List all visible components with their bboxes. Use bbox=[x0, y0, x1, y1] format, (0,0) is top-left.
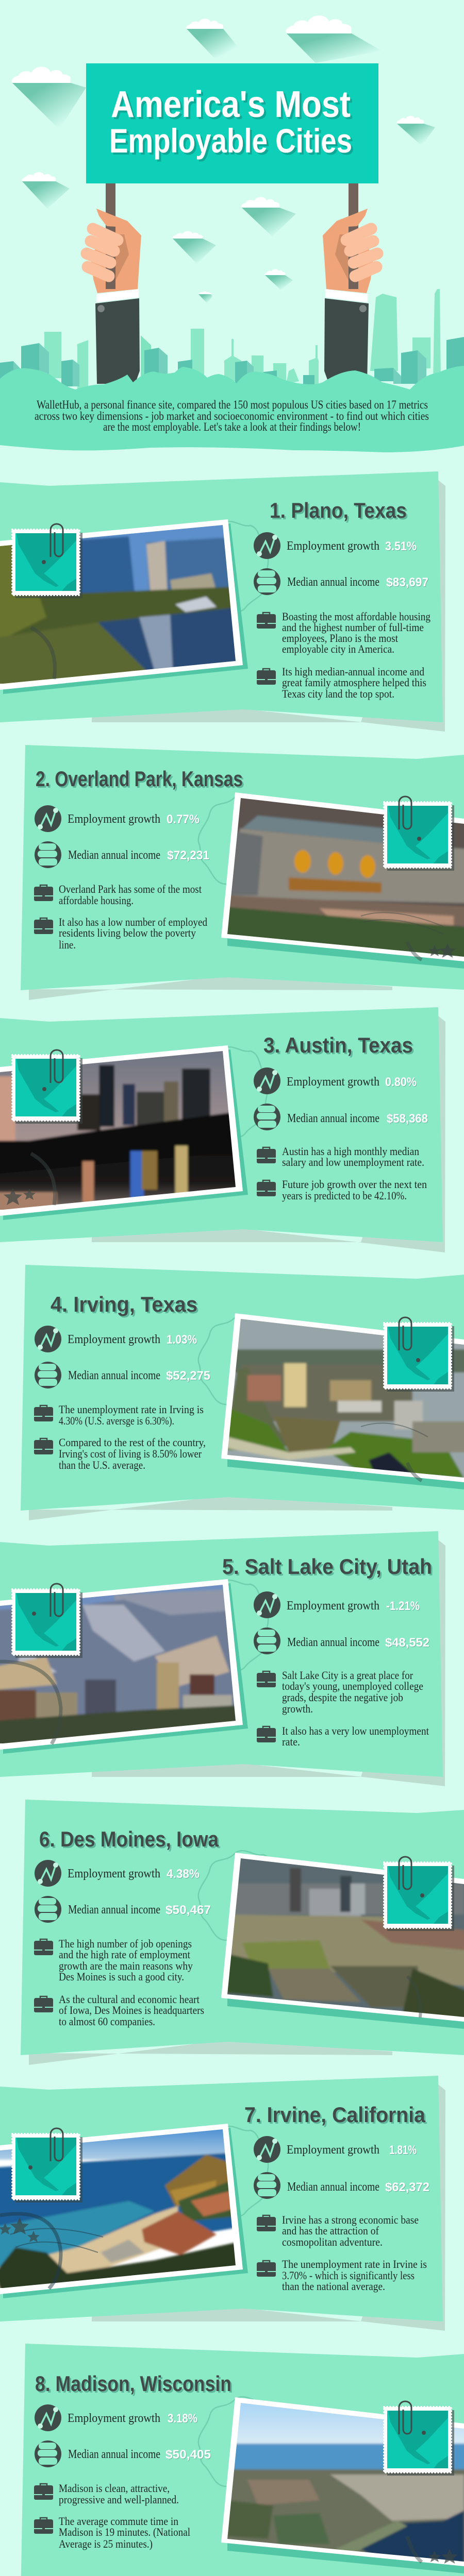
median income: $72,231 bbox=[167, 849, 209, 862]
employment growth bbox=[254, 2136, 417, 2163]
median income: $83,697 bbox=[386, 575, 428, 589]
postmark bbox=[0, 2214, 103, 2289]
fact 1: Overland Park has some of the most bbox=[59, 883, 202, 895]
employment growth: Employment growth bbox=[68, 1867, 160, 1880]
stamp bbox=[384, 2407, 454, 2476]
postmark bbox=[407, 2536, 422, 2562]
median income: Median annual income bbox=[287, 1112, 379, 1125]
fact 1: Madison is clean, attractive, bbox=[59, 2482, 170, 2495]
photo: Des Moines bbox=[221, 1853, 464, 2029]
paperclip bbox=[399, 2401, 411, 2434]
fact 2: Irving's cost of living is 8.50% lower bbox=[59, 1447, 202, 1460]
stamp bbox=[384, 1323, 454, 1392]
employment growth: Employment growth bbox=[68, 812, 160, 826]
fact 2 bbox=[34, 1993, 204, 2028]
fact 2: 3.70% - which is significantly less bbox=[282, 2269, 415, 2282]
fact 2 bbox=[34, 2515, 190, 2550]
fact 1 bbox=[34, 1403, 204, 1427]
median income bbox=[254, 568, 428, 595]
employment growth bbox=[35, 805, 200, 832]
stamp bbox=[384, 1862, 454, 1931]
median income: Median annual income bbox=[68, 2448, 160, 2461]
median income: $48,552 bbox=[385, 1636, 429, 1650]
heading: 2. Overland Park, Kansas bbox=[36, 767, 243, 791]
city skyline bbox=[0, 289, 464, 392]
median income: $62,372 bbox=[385, 2180, 429, 2194]
postmark bbox=[361, 912, 443, 960]
fact 1: and the high rate of employment bbox=[59, 1948, 190, 1961]
panel: 8. Madison, Wisconsin bbox=[21, 2344, 464, 2576]
median income bbox=[35, 841, 209, 868]
employment growth: 3.18% bbox=[168, 2412, 197, 2426]
employment growth: -1.21% bbox=[386, 1599, 420, 1613]
employment growth: Employment growth bbox=[287, 1075, 379, 1089]
fact 1 bbox=[257, 610, 430, 655]
fact 1 bbox=[257, 2213, 419, 2248]
panel: 1. Plano, Texas bbox=[0, 471, 445, 732]
left hand holding pole bbox=[87, 209, 141, 384]
hill with intro text bbox=[0, 366, 464, 452]
fact 2: than the national average. bbox=[282, 2280, 385, 2293]
fact 2: Compared to the rest of the country, bbox=[59, 1436, 206, 1449]
heading: 5. Salt Lake City, Utah bbox=[222, 1554, 432, 1579]
fact 2: As the cultural and economic heart bbox=[59, 1993, 200, 2006]
fact 1 bbox=[257, 1145, 424, 1168]
fact 1 bbox=[257, 1669, 423, 1715]
sign poles bbox=[106, 183, 358, 289]
paperclip bbox=[399, 1317, 411, 1350]
fact 1: The high number of job openings bbox=[59, 1937, 192, 1950]
median income bbox=[254, 2172, 429, 2199]
employment growth bbox=[254, 1591, 420, 1618]
fact 1: and the highest number of full-time bbox=[282, 621, 424, 634]
fact 1: 4.30% (U.S. aversge is 6.30%). bbox=[59, 1414, 174, 1427]
median income: Median annual income bbox=[68, 849, 160, 862]
panel: 2. Overland Park, Kansas bbox=[21, 745, 464, 1000]
header illustration bbox=[0, 15, 464, 452]
employment growth: Employment growth bbox=[287, 539, 379, 553]
fact 2 bbox=[257, 1178, 427, 1202]
fact 2: The average commute time in bbox=[59, 2515, 178, 2528]
heading: 4. Irving, Texas bbox=[51, 1292, 197, 1316]
photo: Union Station bbox=[221, 792, 464, 969]
fact 1 bbox=[34, 1937, 193, 1983]
heading: 8. Madison, Wisconsin bbox=[35, 2371, 231, 2396]
fact 1: Des Moines is such a good city. bbox=[59, 1970, 184, 1983]
fact 2: Texas city land the top spot. bbox=[282, 687, 394, 700]
title sign bbox=[86, 63, 378, 183]
panel: 6. Des Moines, Iowa bbox=[21, 1800, 464, 2065]
median income: $52,275 bbox=[166, 1369, 210, 1383]
fact 1: grads, despite the negative job bbox=[282, 1691, 403, 1704]
paperclip bbox=[51, 1584, 63, 1617]
employment growth: 1.81% bbox=[389, 2143, 417, 2157]
employment growth bbox=[35, 1326, 197, 1352]
median income: Median annual income bbox=[287, 575, 379, 589]
postmark bbox=[361, 1423, 428, 1481]
postmark bbox=[31, 1154, 55, 1205]
employment growth bbox=[254, 1067, 417, 1094]
fact 2: It also has a low number of employed bbox=[59, 916, 207, 928]
heading: 3. Austin, Texas bbox=[263, 1033, 413, 1057]
stamp bbox=[12, 1055, 82, 1124]
employment growth: Employment growth bbox=[68, 2412, 160, 2425]
postmark bbox=[407, 1976, 421, 2018]
fact 2 bbox=[257, 1724, 429, 1748]
fact 2: great family atmosphere helped this bbox=[282, 676, 426, 689]
stamp bbox=[12, 2134, 82, 2202]
employment growth bbox=[254, 532, 417, 559]
median income: Median annual income bbox=[287, 1636, 379, 1649]
stamp bbox=[384, 802, 454, 871]
fact 1: employees, Plano is the most bbox=[282, 632, 398, 645]
heading: 7. Irvine, California bbox=[244, 2103, 426, 2127]
median income: $50,467 bbox=[165, 1903, 211, 1917]
median income bbox=[35, 2441, 211, 2467]
employment growth bbox=[35, 1860, 200, 1887]
photo: Madison bbox=[221, 2397, 464, 2573]
title sign: Employable Cities bbox=[109, 122, 352, 160]
photo: Irvine coast bbox=[0, 2124, 248, 2299]
stamp bbox=[12, 530, 82, 598]
employment growth: Employment growth bbox=[287, 1599, 379, 1613]
hill with intro text: are the most employable. Let's take a look at their findings below! bbox=[103, 420, 361, 433]
stamp bbox=[12, 1589, 82, 1658]
fact 2: The unemployment rate in Irvine is bbox=[282, 2258, 427, 2270]
median income: $58,368 bbox=[387, 1112, 428, 1126]
fact 1 bbox=[34, 883, 202, 907]
fact 1 bbox=[34, 2482, 179, 2506]
postmark bbox=[31, 628, 55, 679]
employment growth: 0.80% bbox=[385, 1075, 417, 1089]
clouds with long shadows bbox=[11, 15, 435, 303]
fact 2 bbox=[257, 665, 426, 700]
fact 1: growth. bbox=[282, 1702, 313, 1715]
fact 1: cosmopolitan adventure. bbox=[282, 2235, 383, 2248]
fact 2: Future job growth over the next ten bbox=[282, 1178, 427, 1191]
title sign: America's Most bbox=[111, 84, 351, 125]
fact 1: progressive and well-planned. bbox=[59, 2493, 179, 2506]
fact 2: Madison is 19 minutes. (National bbox=[59, 2526, 190, 2538]
median income bbox=[254, 1104, 428, 1130]
median income: $50,405 bbox=[165, 2448, 211, 2462]
employment growth bbox=[35, 2404, 197, 2431]
fact 2: Its high median-annual income and bbox=[282, 665, 424, 678]
fact 1: today's young, unemployed college bbox=[282, 1680, 423, 1692]
photo: Salt Lake City bbox=[0, 1579, 248, 1754]
fact 2 bbox=[257, 2258, 427, 2293]
paperclip bbox=[51, 524, 63, 557]
fact 2: than the U.S. average. bbox=[59, 1459, 145, 1471]
photo: Irving bbox=[221, 1313, 464, 1489]
fact 2: years is predicted to be 42.10%. bbox=[282, 1189, 407, 1202]
fact 1: Irvine has a strong economic base bbox=[282, 2213, 419, 2226]
fact 2: Average is 25 minutes.) bbox=[59, 2537, 153, 2550]
median income: Median annual income bbox=[68, 1369, 160, 1382]
fact 2 bbox=[34, 1436, 206, 1471]
fact 1: The unemployment rate in Irving is bbox=[59, 1403, 204, 1416]
employment growth: Employment growth bbox=[68, 1333, 160, 1346]
fact 1: Boasting the most affordable housing bbox=[282, 610, 430, 623]
fact 2: to almost 60 companies. bbox=[59, 2015, 155, 2028]
paperclip bbox=[51, 1050, 63, 1083]
employment growth: Employment growth bbox=[287, 2143, 379, 2157]
fact 2: of Iowa, Des Moines is headquarters bbox=[59, 2004, 204, 2016]
fact 2: line. bbox=[59, 938, 76, 951]
median income: Median annual income bbox=[68, 1903, 160, 1917]
photo: Austin bbox=[0, 1045, 248, 1221]
fact 1: Salt Lake City is a great place for bbox=[282, 1669, 413, 1682]
median income: Median annual income bbox=[287, 2180, 379, 2194]
heading: 1. Plano, Texas bbox=[270, 498, 407, 522]
employment growth: 3.51% bbox=[385, 539, 417, 553]
fact 2 bbox=[34, 916, 207, 951]
employment growth: 1.03% bbox=[167, 1333, 197, 1347]
employment growth: 0.77% bbox=[167, 812, 200, 826]
right hand holding pole bbox=[323, 209, 377, 384]
paperclip bbox=[399, 1857, 411, 1890]
postmark bbox=[0, 1662, 61, 1744]
fact 1: Austin has a high monthly median bbox=[282, 1145, 419, 1158]
fact 2: rate. bbox=[282, 1735, 300, 1748]
panel: 5. Salt Lake City, Utah bbox=[0, 1531, 445, 1786]
panel: 4. Irving, Texas bbox=[21, 1265, 464, 1520]
heading: 6. Des Moines, Iowa bbox=[39, 1827, 219, 1851]
photo: Plano bbox=[0, 519, 248, 694]
panel: 3. Austin, Texas bbox=[0, 1007, 445, 1252]
fact 2: It also has a very low unemployment bbox=[282, 1724, 429, 1737]
paperclip bbox=[51, 2128, 63, 2161]
median income bbox=[35, 1896, 211, 1923]
panel: 7. Irvine, California bbox=[0, 2076, 445, 2331]
median income bbox=[35, 1362, 210, 1388]
fact 1: salary and low unemployment rate. bbox=[282, 1156, 424, 1168]
fact 1: employable city in America. bbox=[282, 642, 394, 655]
fact 1: affordable housing. bbox=[59, 894, 134, 907]
employment growth: 4.38% bbox=[167, 1867, 200, 1881]
paperclip bbox=[399, 796, 411, 829]
fact 1: and has the attraction of bbox=[282, 2224, 379, 2237]
fact 2: residents living below the poverty bbox=[59, 926, 196, 939]
fact 1: growth are the main reasons why bbox=[59, 1959, 193, 1972]
median income bbox=[254, 1628, 429, 1654]
